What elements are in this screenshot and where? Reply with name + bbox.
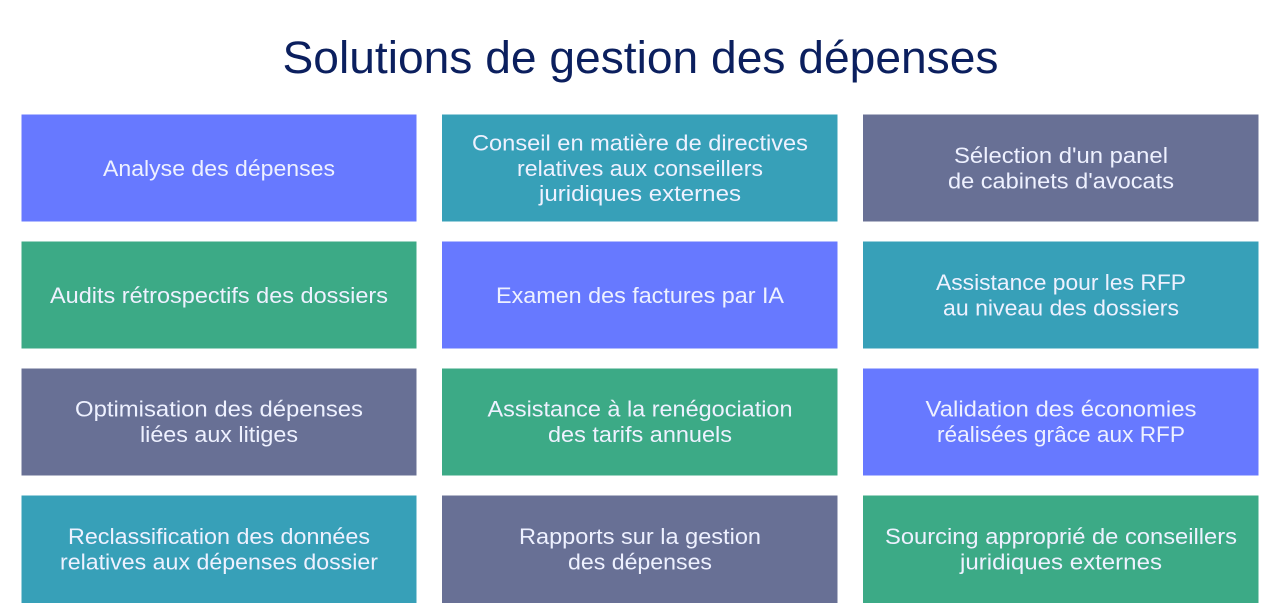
panel: Sourcing approprié [863, 496, 1258, 603]
panel: Analyse des dépenses: Analyse des dépenses [103, 156, 335, 181]
panel: Audits rétrospectifs: Audits rétrospectifs des dossiers [50, 283, 388, 308]
panel: Optimisation des dépenses [22, 368, 416, 476]
panel: Assistance pour les RFP [863, 242, 1258, 348]
panel: Assistance à la renégociation: des tarifs annuels [548, 422, 732, 447]
panel: Examen des factures: Examen des factures par IA [496, 283, 784, 308]
panel: Sélection d'un panel: de cabinets d'avocats [948, 168, 1174, 194]
panel: Conseil en matière de directives: Conseil en matière de directives [472, 130, 808, 156]
panel: Reclassification des données: Reclassification des données [68, 524, 370, 549]
panel: Assistance à la renégociation: Assistance à la renégociation [488, 396, 792, 422]
panel: Analyse des dépenses [22, 114, 416, 222]
panel: Assistance pour les RFP: Assistance pour les RFP [936, 270, 1186, 295]
panel: Sourcing approprié: juridiques externes [959, 550, 1162, 574]
panel: Validation des économies: Validation des économies [926, 396, 1196, 422]
panel: Sélection d'un panel [863, 114, 1258, 222]
title: Solutions de gestion des dépenses [282, 32, 999, 83]
panel: Conseil en matière de directives [442, 114, 838, 222]
panel: Rapports sur la gestion [442, 496, 838, 603]
panel: Audits rétrospectifs [22, 242, 416, 348]
panel: Assistance à la renégociation [442, 368, 838, 476]
panel: Reclassification des données: relatives aux dépenses dossier [60, 550, 378, 574]
panel: Sourcing approprié: Sourcing approprié de conseillers [885, 524, 1237, 549]
panel: Rapports sur la gestion: Rapports sur la gestion [519, 524, 761, 549]
panel: Examen des factures [442, 242, 838, 348]
panel: Conseil en matière de directives: juridiques externes [538, 181, 741, 206]
panel: Validation des économies: réalisées grâce aux RFP [937, 422, 1185, 447]
panel: Rapports sur la gestion: des dépenses [568, 550, 712, 574]
panel: Optimisation des dépenses: Optimisation des dépenses [75, 396, 363, 422]
panel: Validation des économies [863, 368, 1258, 476]
panel: Assistance pour les RFP: au niveau des dossiers [943, 296, 1179, 320]
panel: Optimisation des dépenses: liées aux litiges [140, 422, 298, 447]
panel: Reclassification des données [22, 496, 416, 603]
panel: Sélection d'un panel: Sélection d'un panel [954, 143, 1168, 168]
panel: Conseil en matière de directives: relatives aux conseillers [517, 156, 763, 181]
